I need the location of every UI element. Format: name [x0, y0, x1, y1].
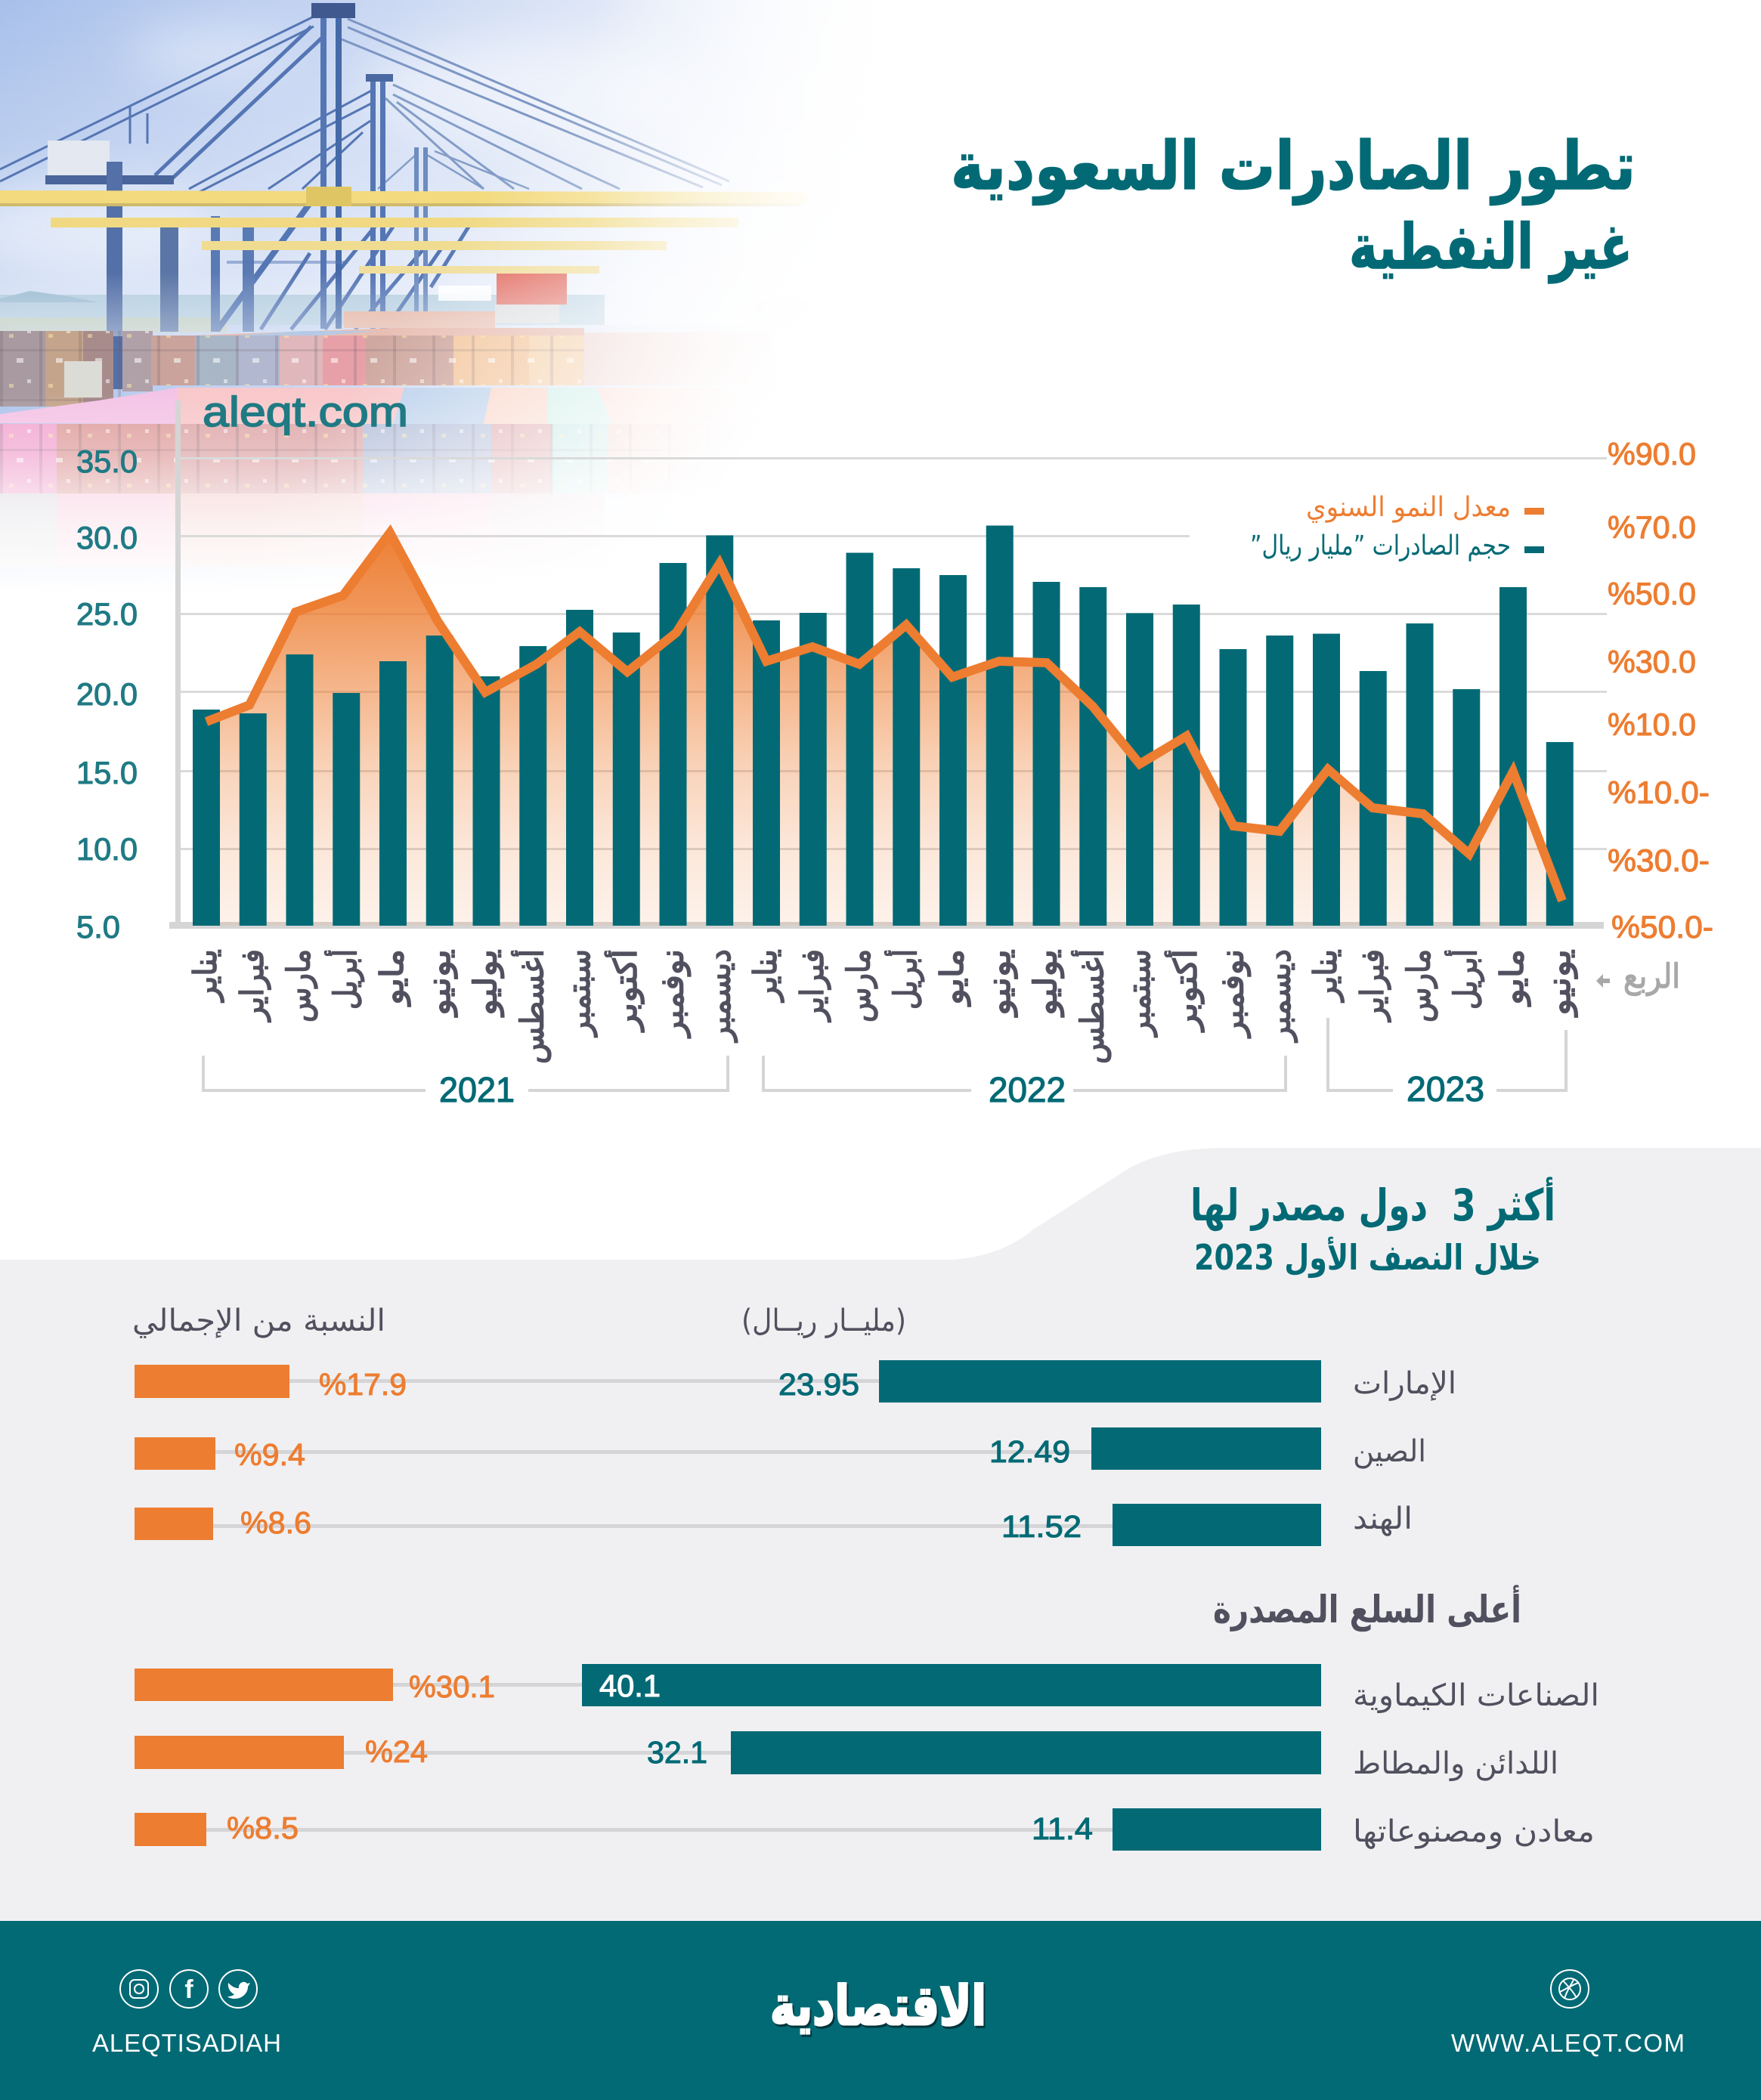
month labels: ديسمبر	[700, 949, 737, 1043]
icon: facebook: f	[184, 1975, 193, 2004]
growth area fill	[206, 533, 1562, 926]
month labels: أكتوبر	[605, 949, 644, 1032]
month labels: نوفمبر	[653, 949, 691, 1038]
month labels: مايو	[1493, 949, 1530, 1007]
left axis labels: 10.0	[76, 831, 138, 867]
heading: top three countries: خلال النصف الأول 2023	[1194, 1236, 1541, 1278]
heading: top three countries: أكثر 3 دول مصدر لها	[1190, 1177, 1555, 1232]
title	[951, 127, 1636, 283]
quarter label with arrow	[1596, 957, 1680, 996]
bar chart: top exported goods: اللدائن والمطاط	[1353, 1746, 1558, 1781]
bar chart: top three countries: %8.6	[240, 1505, 311, 1540]
bar chart: top exported goods: %30.1	[409, 1669, 495, 1704]
month labels: أبريل	[1444, 949, 1484, 1010]
left axis labels: 35.0	[76, 444, 138, 479]
bar chart: top three countries	[135, 1360, 1456, 1546]
icon: facebook	[170, 1970, 208, 2008]
heading: top exported goods: أعلى السلع المصدرة	[1213, 1585, 1521, 1632]
column headings	[132, 1304, 906, 1338]
handle text: ALEQTISADIAH	[92, 2029, 281, 2057]
bar chart: top exported goods: 11.4	[1032, 1811, 1093, 1846]
month labels: مايو	[373, 949, 410, 1007]
growth line	[206, 533, 1562, 901]
right axis labels: %70.0	[1608, 509, 1696, 545]
month labels: سبتمبر	[560, 949, 597, 1038]
logo: الاقتصادية	[770, 1974, 986, 2037]
bar chart: top three countries: %17.9	[319, 1367, 407, 1402]
month labels: يناير	[1307, 949, 1344, 1003]
legend: حجم الصادرات ”مليار ريال”	[1250, 530, 1511, 561]
year brackets: 2022	[989, 1070, 1066, 1109]
site label: aleqt.com: aleqt.com	[203, 388, 408, 435]
bar chart: top exported goods: %24	[365, 1734, 428, 1769]
right axis labels	[1608, 436, 1713, 945]
month labels: أبريل	[884, 949, 924, 1010]
photo: port cranes and container ship	[0, 0, 983, 605]
website text: WWW.ALEQT.COM	[1451, 2029, 1685, 2057]
month labels: يونيو	[1540, 949, 1577, 1017]
month labels: أبريل	[324, 949, 364, 1010]
right axis labels: %30.0	[1608, 644, 1696, 679]
month labels: فبراير	[1354, 949, 1391, 1022]
bar chart: top three countries: %9.4	[234, 1437, 305, 1472]
legend	[1250, 492, 1544, 561]
column headings: (مليــار ريــال)	[741, 1304, 906, 1338]
year brackets	[203, 1018, 1566, 1109]
month labels: يناير	[187, 949, 224, 1003]
month labels: مارس	[840, 949, 877, 1022]
icon: twitter	[219, 1970, 257, 2008]
quarter label with arrow: الربع	[1623, 957, 1680, 996]
right axis labels: %30.0-	[1608, 843, 1710, 878]
month labels: مايو	[933, 949, 970, 1007]
left axis labels: 30.0	[76, 520, 138, 555]
title: غير النفطية	[1349, 212, 1633, 283]
month labels: سبتمبر	[1120, 949, 1157, 1038]
month labels: أغسطس	[1071, 949, 1110, 1064]
month labels: يناير	[747, 949, 784, 1003]
bar chart: top three countries: 11.52	[1001, 1509, 1082, 1544]
bar chart: top exported goods: 32.1	[647, 1735, 707, 1770]
bar chart: top three countries: الهند	[1353, 1502, 1413, 1536]
month labels	[187, 949, 1577, 1064]
exports bars	[193, 526, 1574, 926]
right axis labels: %10.0	[1608, 707, 1696, 742]
month labels: يونيو	[420, 949, 457, 1017]
right axis labels: %50.0-	[1611, 909, 1713, 945]
combined chart: exports bars and growth line	[169, 401, 1607, 929]
bar chart: top three countries: الصين	[1353, 1434, 1426, 1469]
bar chart: top three countries: 23.95	[778, 1367, 859, 1402]
month labels: يوليو	[467, 949, 503, 1017]
month labels: فبراير	[234, 949, 271, 1022]
month labels: أغسطس	[511, 949, 550, 1064]
left axis labels: 15.0	[76, 755, 138, 790]
year brackets: 2021	[439, 1070, 515, 1109]
month labels: ديسمبر	[1260, 949, 1297, 1043]
bar chart: top exported goods: 40.1	[599, 1669, 661, 1703]
left axis labels: 20.0	[76, 676, 138, 712]
bar chart: top exported goods: %8.5	[227, 1811, 299, 1845]
year brackets: 2023	[1407, 1069, 1484, 1109]
right axis labels: %50.0	[1608, 576, 1696, 611]
column headings: النسبة من الإجمالي	[132, 1304, 385, 1338]
left axis labels: 5.0	[76, 909, 120, 945]
panel: lower grey section	[0, 1148, 1761, 1921]
month labels: يوليو	[1026, 949, 1064, 1017]
left axis labels	[76, 444, 138, 945]
left axis labels: 25.0	[76, 596, 138, 632]
title: تطور الصادرات السعودية	[951, 127, 1636, 206]
month labels: فبراير	[794, 949, 831, 1022]
month labels: مارس	[1400, 949, 1438, 1022]
bar chart: top three countries: 12.49	[989, 1434, 1070, 1469]
month labels: يونيو	[980, 949, 1017, 1017]
legend: معدل النمو السنوي	[1306, 492, 1511, 523]
bar chart: top exported goods	[135, 1664, 1599, 1851]
icon: website globe	[1551, 1970, 1589, 2008]
footer	[0, 1921, 1761, 2100]
icon: instagram	[120, 1970, 158, 2008]
bar chart: top exported goods: معادن ومصنوعاتها	[1353, 1814, 1595, 1849]
bar chart: top exported goods: الصناعات الكيماوية	[1353, 1678, 1599, 1713]
bar chart: top three countries: الإمارات	[1353, 1366, 1456, 1401]
month labels: مارس	[280, 949, 317, 1022]
month labels: نوفمبر	[1214, 949, 1250, 1038]
right axis labels: %10.0-	[1608, 775, 1710, 810]
month labels: أكتوبر	[1165, 949, 1204, 1032]
heading: top three countries	[1190, 1177, 1555, 1278]
right axis labels: %90.0	[1608, 436, 1696, 472]
